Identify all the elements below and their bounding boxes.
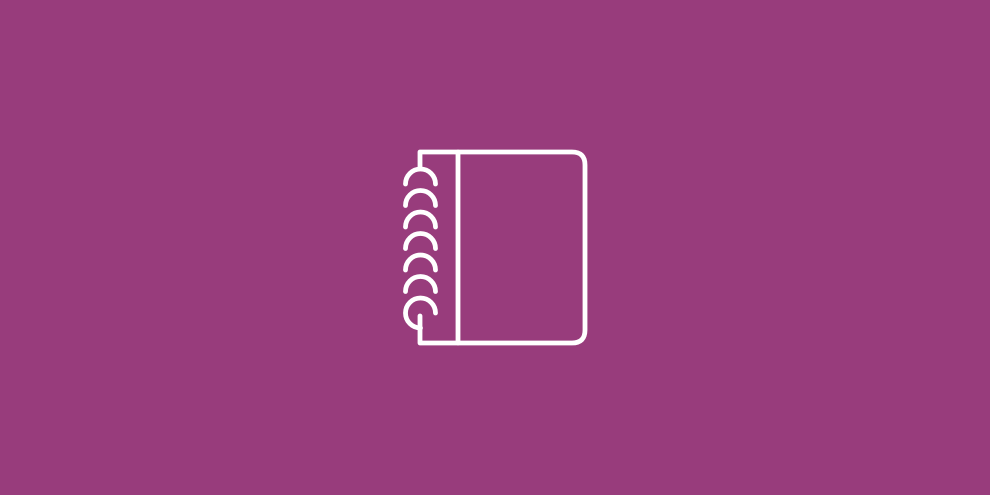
icon: spiral notebook (406, 152, 585, 343)
spiral rings (406, 169, 436, 328)
page divider line (456, 152, 460, 343)
notebook cover outline (420, 152, 585, 343)
